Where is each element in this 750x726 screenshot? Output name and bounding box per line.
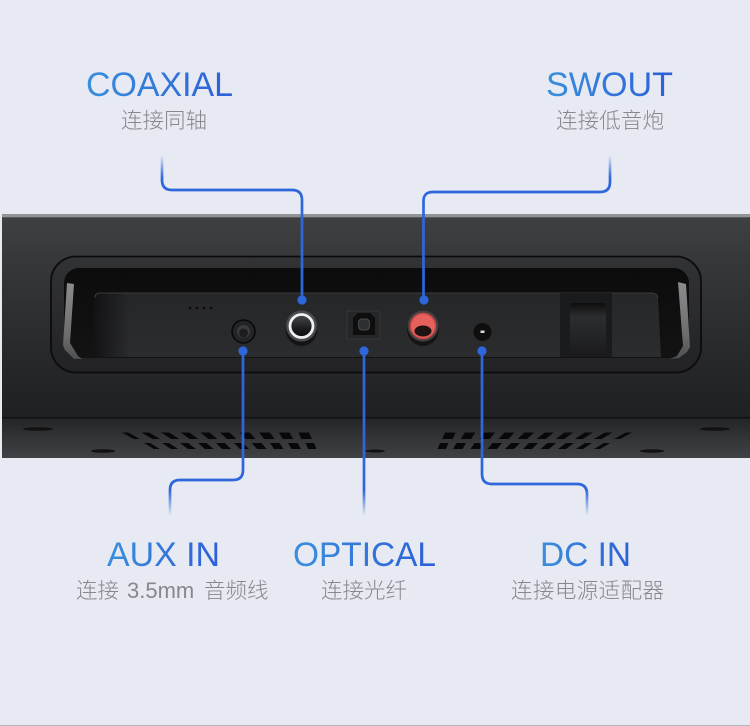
- callout: AUX IN: [76, 346, 269, 603]
- connector dot: OPTICAL: [359, 346, 369, 356]
- connector dot: DC IN: [477, 346, 487, 356]
- connector line: OPTICAL: [363, 351, 365, 516]
- OPTICAL port: [347, 311, 380, 339]
- connector line: COAXIAL: [162, 155, 302, 300]
- connector line: DC IN: [482, 351, 587, 516]
- description: COAXIAL: 连接同轴: [121, 109, 207, 133]
- AUX jack: [232, 320, 255, 343]
- connector line: SWOUT: [423, 155, 610, 300]
- connector dot: COAXIAL: [297, 295, 307, 305]
- callout: SWOUT: [419, 66, 673, 305]
- lower housing: [2, 418, 750, 458]
- slide switch: [570, 303, 606, 357]
- description: OPTICAL: 连接光纤: [321, 579, 407, 603]
- SWOUT jack: [407, 310, 439, 346]
- description: DC IN: 连接电源适配器: [511, 579, 664, 603]
- right mirror edge: [670, 282, 690, 359]
- heading: DC IN: DC IN: [540, 536, 631, 574]
- description: AUX IN: 3.5mm: [127, 578, 194, 603]
- connector line: AUX IN: [170, 351, 243, 516]
- description: AUX IN: 音频线: [204, 579, 269, 603]
- recess well: [64, 268, 689, 358]
- COAXIAL jack: [286, 310, 318, 346]
- right vent: [438, 432, 632, 449]
- callout: DC IN: [477, 346, 664, 603]
- connector dot: AUX IN: [238, 346, 248, 356]
- heading: COAXIAL: COAXIAL: [86, 66, 233, 104]
- heading: OPTICAL: OPTICAL: [293, 536, 436, 574]
- DC jack: [474, 323, 492, 341]
- soundbar body: [2, 214, 750, 458]
- description: SWOUT: 连接低音炮: [556, 109, 664, 133]
- indicator dots: [189, 307, 212, 309]
- description: AUX IN: 连接: [76, 579, 119, 603]
- connector dot: SWOUT: [419, 295, 429, 305]
- left vent: [122, 432, 316, 449]
- port recess: [51, 256, 701, 372]
- port plate: [92, 293, 661, 357]
- heading: SWOUT: SWOUT: [546, 66, 673, 104]
- upper housing: [2, 218, 750, 418]
- switch housing: [560, 293, 612, 357]
- heading: AUX IN: AUX IN: [107, 536, 220, 574]
- callout: OPTICAL: [293, 346, 436, 603]
- left mirror edge: [63, 283, 82, 359]
- callout: COAXIAL: [86, 66, 307, 305]
- soundbar top edge: [2, 214, 750, 218]
- rubber feet: [23, 427, 730, 453]
